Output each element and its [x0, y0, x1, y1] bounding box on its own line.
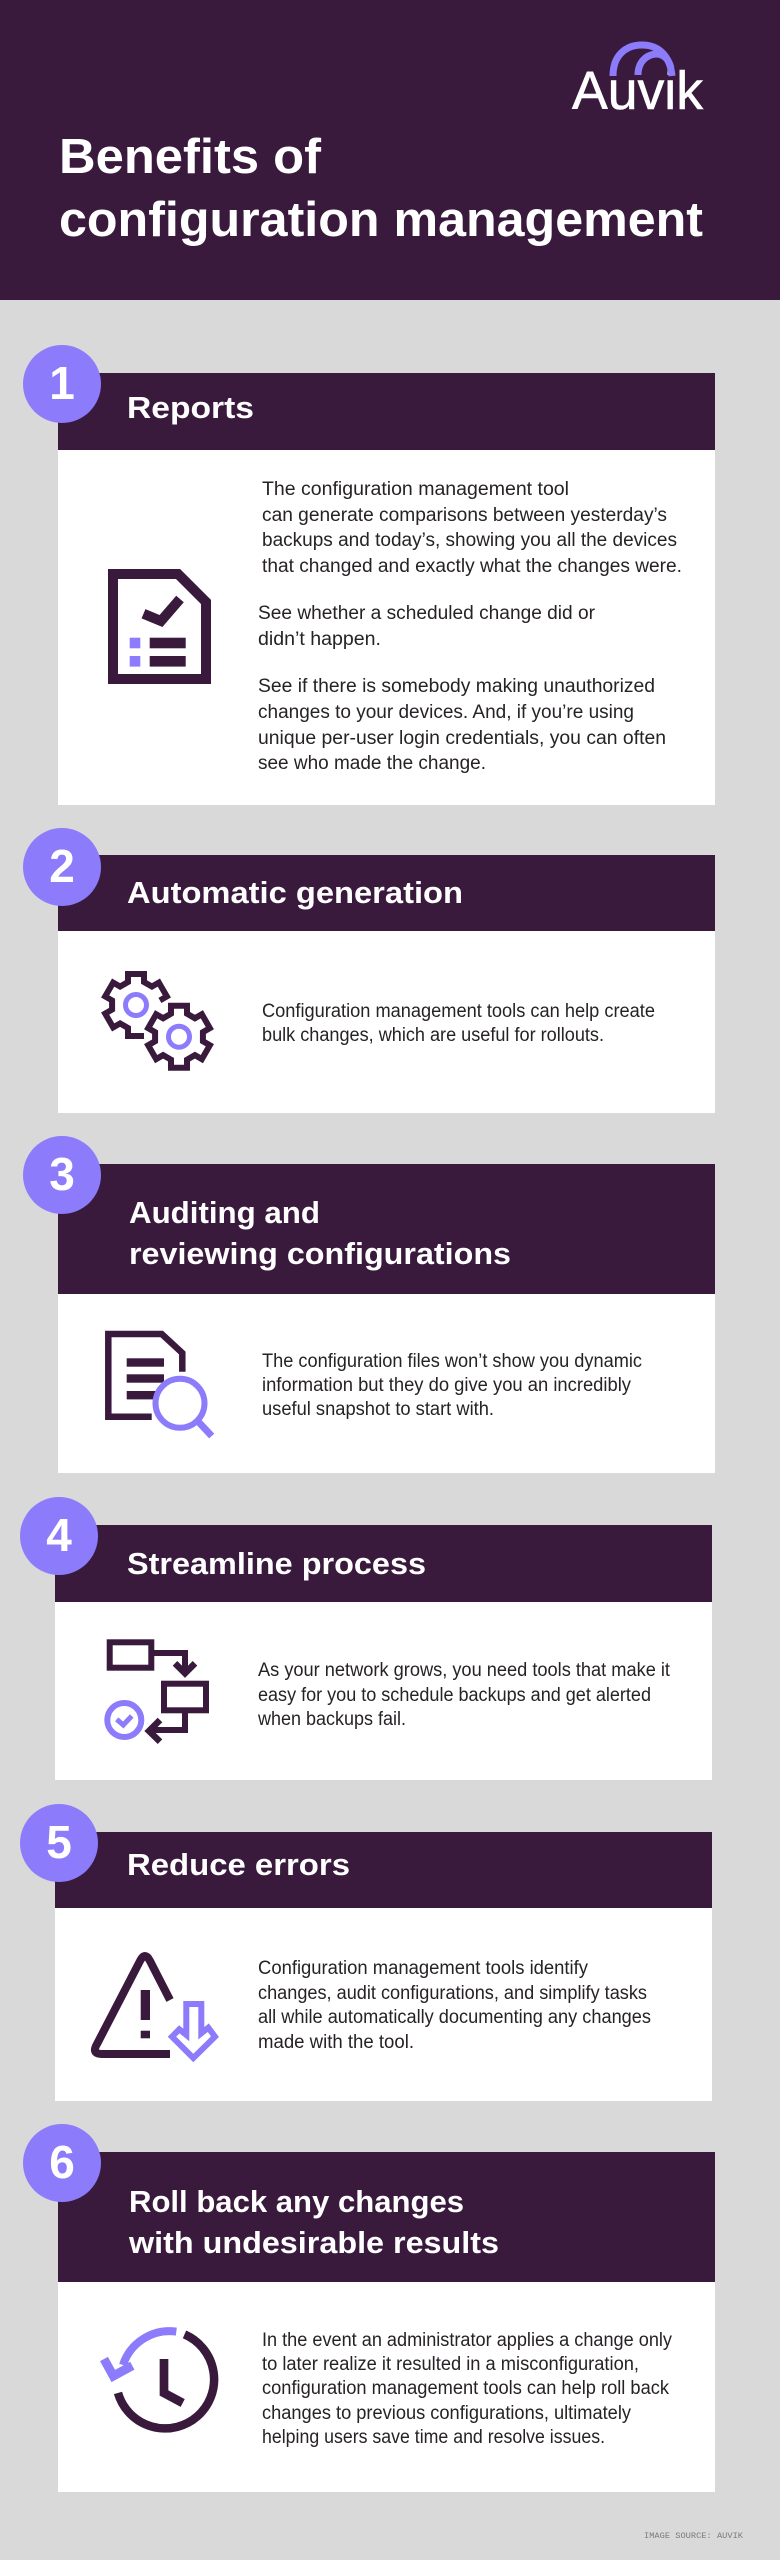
title	[59, 130, 703, 247]
section 1 text: unique per-user login credentials, you can often	[258, 728, 666, 749]
number badge 5	[20, 1804, 98, 1882]
section 1 text	[258, 479, 682, 774]
section 1 text: See whether a scheduled change did or	[258, 603, 596, 624]
section 1 text: backups and today’s, showing you all the devices	[262, 530, 677, 551]
section 1 body card	[58, 450, 715, 805]
section 1 text: didn’t happen.	[258, 629, 381, 650]
section 2 text: Configuration management tools can help create	[262, 1001, 655, 1022]
section 4 text: As your network grows, you need tools that make it	[258, 1660, 671, 1681]
number badge 5: 5	[46, 1816, 72, 1868]
icon: clock with rollback arrow	[104, 2331, 214, 2428]
section 1 heading bar: Reports	[127, 390, 254, 425]
panel 4: Streamline process	[20, 1497, 712, 1780]
icon: warning triangle with down arrow	[95, 1956, 215, 2058]
section 1 text: can generate comparisons between yesterday’s	[262, 505, 667, 526]
panel 3: Auditing and reviewing configurations	[23, 1136, 715, 1473]
section 2 heading bar: Automatic generation	[127, 875, 463, 910]
section 3 heading bar: reviewing configurations	[129, 1236, 511, 1271]
section 6 body card	[58, 2282, 715, 2492]
logo: Auvik: Auvik	[572, 61, 704, 121]
image source credit: IMAGE SOURCE: AUVIK	[644, 2531, 744, 2541]
section 4 heading bar: Streamline process	[127, 1546, 426, 1581]
section 6 text: configuration management tools can help roll back	[262, 2378, 669, 2399]
section 1 text: see who made the change.	[258, 753, 486, 774]
section 6 heading bar: Roll back any changes	[129, 2184, 464, 2219]
section 6 heading bar: with undesirable results	[128, 2225, 499, 2260]
section 2 heading bar	[58, 855, 715, 931]
section 6 text	[262, 2330, 672, 2448]
panel 5: Reduce errors	[20, 1804, 712, 2101]
icon: workflow boxes and arrows	[107, 1642, 206, 1742]
section 3 text: information but they do give you an incredibly	[262, 1375, 631, 1396]
section 4 body card	[55, 1602, 712, 1780]
section 2 text: bulk changes, which are useful for rollouts.	[262, 1025, 604, 1046]
section 4 text: easy for you to schedule backups and get alerted	[258, 1685, 651, 1706]
panel 6: Roll back	[23, 2124, 715, 2492]
section 6 text: helping users save time and resolve issues.	[262, 2427, 605, 2448]
section 5 text: made with the tool.	[258, 2032, 414, 2053]
number badge 6: 6	[49, 2136, 75, 2188]
icon: document with checkmark	[113, 574, 206, 679]
section 5 text	[258, 1958, 651, 2053]
section 2 body card	[58, 931, 715, 1113]
section 5 body card	[55, 1908, 712, 2101]
section 3 heading bar	[58, 1164, 715, 1294]
number badge 2	[23, 828, 101, 906]
number badge 1	[23, 345, 101, 423]
section 4 heading bar	[55, 1525, 712, 1602]
number badge 2: 2	[49, 840, 75, 892]
panel 2: Automatic generation	[23, 828, 715, 1113]
section 3 text: useful snapshot to start with.	[262, 1399, 494, 1420]
section 2 text	[262, 1001, 655, 1046]
section 6 text: changes to previous configurations, ultimately	[262, 2403, 631, 2424]
section 6 text: to later realize it resulted in a misconfiguration,	[262, 2354, 639, 2375]
icon: document with magnifier	[108, 1334, 212, 1436]
number badge 6	[23, 2124, 101, 2202]
section 5 heading bar	[55, 1832, 712, 1908]
number badge 4	[20, 1497, 98, 1575]
section 1 text: that changed and exactly what the changes were.	[262, 556, 682, 577]
title: Benefits of	[59, 130, 322, 184]
section 6 heading bar	[58, 2152, 715, 2282]
icon: two gears	[105, 974, 210, 1068]
section 1 heading bar	[58, 373, 715, 450]
section 4 text: when backups fail.	[257, 1709, 406, 1730]
section 3 text: The configuration files won’t show you dynamic	[262, 1351, 642, 1372]
number badge 1: 1	[49, 357, 75, 409]
number badge 4: 4	[46, 1509, 72, 1561]
section 3 body card	[58, 1294, 715, 1473]
section 4 text	[257, 1660, 671, 1730]
section 5 text: changes, audit configurations, and simplify tasks	[258, 1983, 647, 2004]
section 5 heading bar: Reduce errors	[127, 1847, 350, 1882]
section 1 text: See if there is somebody making unauthorized	[258, 676, 655, 697]
section 5 text: all while automatically documenting any changes	[258, 2007, 651, 2028]
section 3 text	[262, 1351, 642, 1420]
panel 1: Reports	[23, 345, 715, 805]
section 5 text: Configuration management tools identify	[258, 1958, 588, 1979]
section 1 text: The configuration management tool	[262, 479, 569, 500]
header banner	[0, 0, 780, 300]
number badge 3	[23, 1136, 101, 1214]
section 6 text: In the event an administrator applies a change only	[262, 2330, 672, 2351]
section 3 heading bar: Auditing and	[129, 1195, 320, 1230]
section 1 text: changes to your devices. And, if you’re using	[258, 702, 634, 723]
title: configuration management	[59, 193, 703, 247]
number badge 3: 3	[49, 1148, 75, 1200]
